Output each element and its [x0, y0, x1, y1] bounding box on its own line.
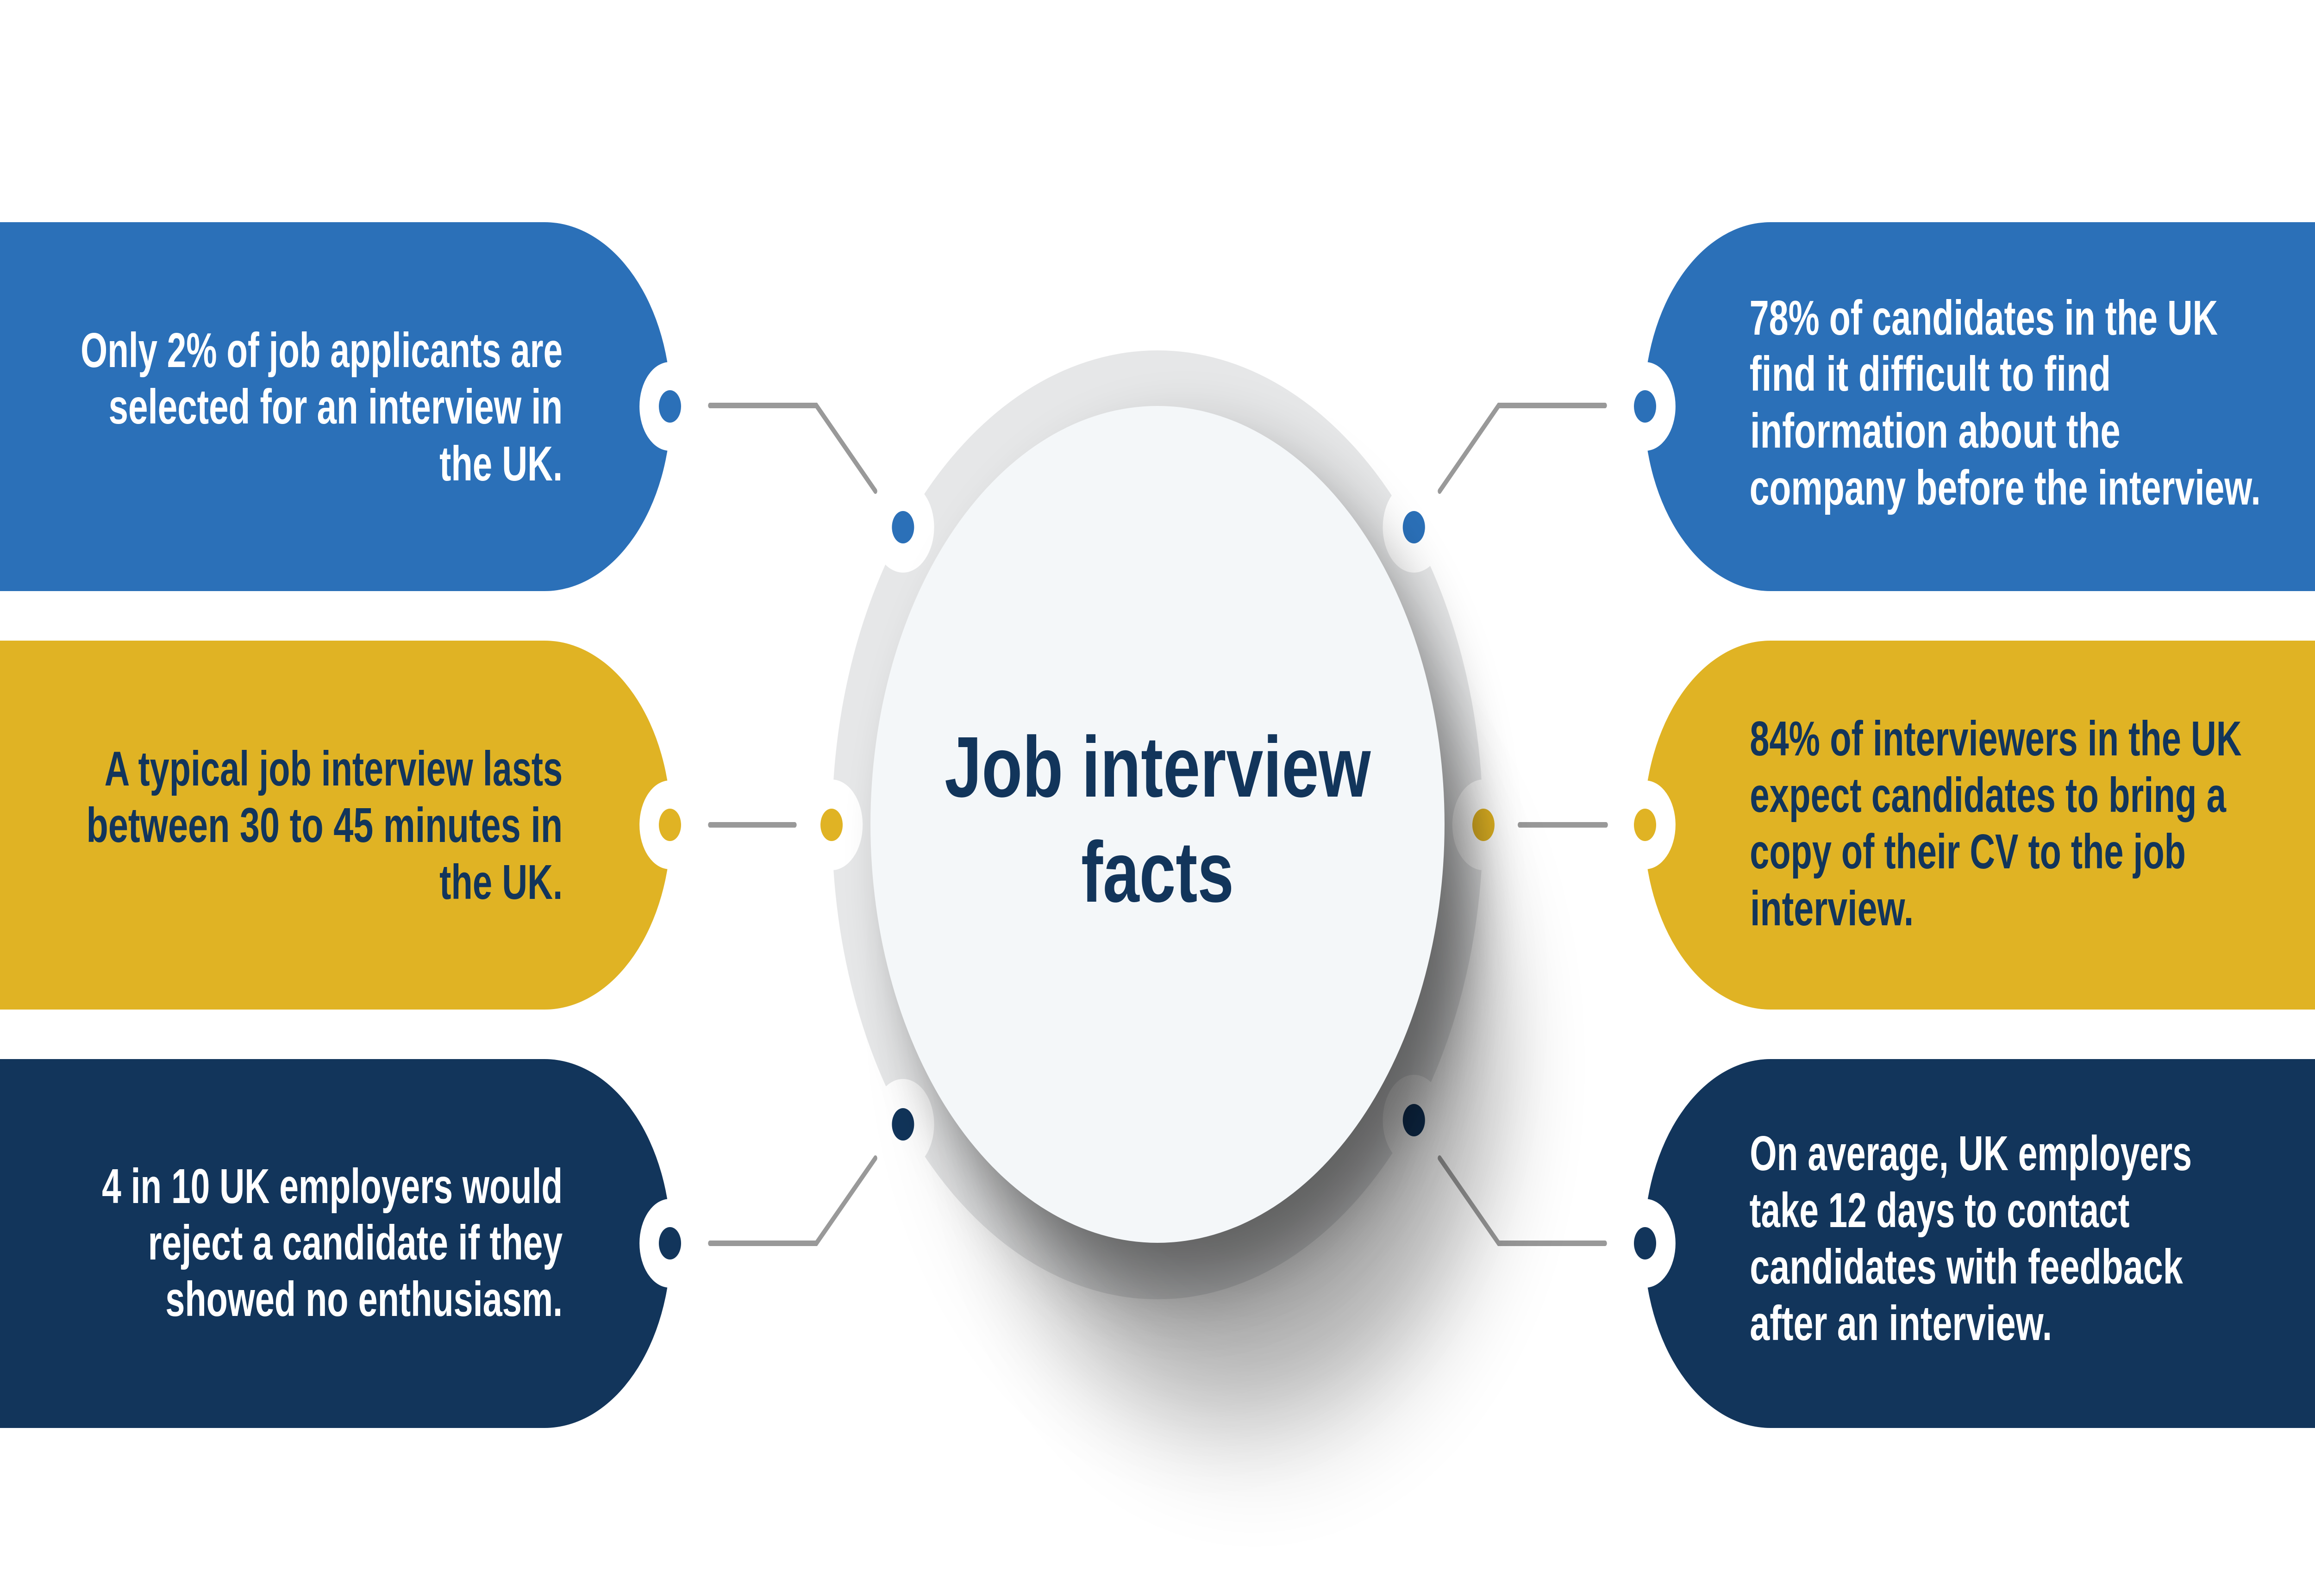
panel: 4 in 10 employers: showed no enthusiasm.	[165, 1272, 563, 1327]
panel: typical interview length: the UK.	[439, 855, 563, 910]
panel: typical interview length: A typical job interview lasts	[105, 742, 563, 796]
drop shadow	[897, 447, 1502, 1426]
panel: 4 in 10 employers: reject a candidate if they	[148, 1216, 563, 1270]
panel: UK employers feedback: candidates with feedback	[1750, 1240, 2183, 1294]
panel: UK employers feedback: On average, UK employers	[1750, 1127, 2192, 1181]
panel: UK employers feedback	[1614, 1059, 2315, 1428]
panel: only 2% selected	[0, 222, 701, 591]
panel: 4 in 10 employers	[0, 1059, 701, 1428]
title: facts	[1081, 824, 1234, 920]
panel: 4 in 10 employers: 4 in 10 UK employers would	[102, 1160, 563, 1214]
title: Job interview	[945, 719, 1371, 815]
panel: typical interview length: between 30 to 45 minutes in	[87, 798, 563, 853]
panel: UK employers feedback: after an interview.	[1750, 1297, 2052, 1351]
panel: typical interview length	[0, 641, 701, 1010]
panel: 78% of candidates: information about the	[1750, 404, 2121, 458]
panel: only 2% selected: the UK.	[439, 437, 563, 491]
panel: only 2% selected: selected for an interview in	[109, 380, 563, 434]
connector lines	[710, 405, 1606, 1243]
outer ring with white halos	[801, 350, 1514, 1299]
panel: 84% of interviewers	[1614, 641, 2315, 1010]
node dots on ring	[820, 511, 1495, 1141]
panel: 84% of interviewers: copy of their CV to the job	[1750, 825, 2186, 879]
panel: UK employers feedback: take 12 days to contact	[1750, 1184, 2130, 1238]
title	[945, 719, 1371, 920]
panel: 84% of interviewers: 84% of interviewers in the UK	[1750, 712, 2242, 766]
panel: 78% of candidates: find it difficult to find	[1750, 347, 2111, 401]
panel: 78% of candidates: 78% of candidates in the UK	[1750, 291, 2218, 345]
panel: 84% of interviewers: expect candidates to bring a	[1750, 768, 2227, 823]
central disc	[870, 406, 1445, 1243]
panel: 84% of interviewers: interview.	[1750, 882, 1914, 936]
panel: 78% of candidates	[1614, 222, 2315, 591]
panel: only 2% selected: Only 2% of job applicants are	[81, 324, 563, 378]
panel: 78% of candidates: company before the interview.	[1750, 461, 2261, 515]
